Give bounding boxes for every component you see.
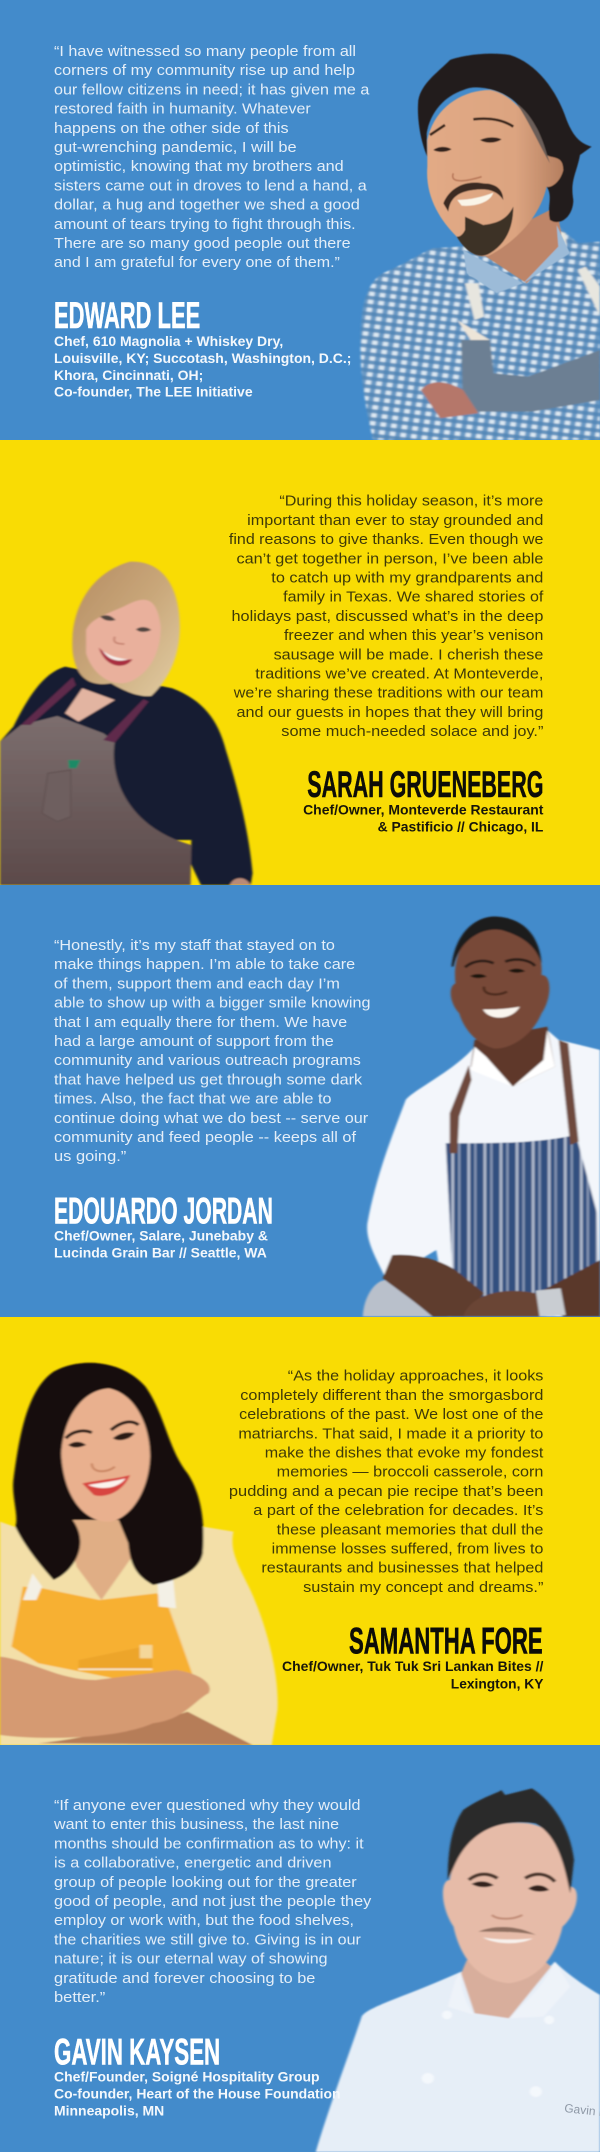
quote: Gavin Kaysen: months should be confirmation as to why: it <box>54 1835 364 1852</box>
quote: Gavin Kaysen: employ or work with, but the food shelves, <box>54 1912 354 1929</box>
quote: Gavin Kaysen: “If anyone ever questioned why they would <box>54 1797 360 1814</box>
quote: Samantha Fore: pudding and a pecan pie recipe that’s been <box>229 1483 543 1500</box>
quote: Gavin Kaysen: is a collaborative, energetic and driven <box>54 1855 332 1872</box>
quote: Gavin Kaysen: the charities we still give to. Giving is in our <box>54 1931 361 1948</box>
quote: Sarah Grueneberg: we’re sharing these traditions with our team <box>233 685 543 702</box>
quote: Edward Lee: corners of my community rise up and help <box>54 62 355 79</box>
role: Samantha Fore: Chef/Owner, Tuk Tuk Sri Lankan Bites // <box>282 1659 544 1674</box>
quote: Gavin Kaysen: good of people, and not just the people they <box>54 1893 372 1910</box>
panel: Edward Lee <box>54 45 600 440</box>
quote: Edouardo Jordan: community and various outreach programs <box>54 1052 361 1069</box>
quote: Gavin Kaysen: want to enter this business, the last nine <box>53 1816 339 1833</box>
role: Samantha Fore: Lexington, KY <box>451 1676 543 1691</box>
role: Edward Lee: Chef, 610 Magnolia + Whiskey Dry, <box>54 334 283 349</box>
role: Edouardo Jordan: Chef/Owner, Salare, Junebaby & <box>54 1229 268 1244</box>
quote: Edouardo Jordan: continue doing what we do best -- serve our <box>54 1110 368 1127</box>
quote: Edward Lee: amount of tears trying to fight through this. <box>54 216 356 233</box>
role: Edward Lee <box>54 334 351 399</box>
quote: Edouardo Jordan: that have helped us get through some dark <box>54 1071 363 1088</box>
quote: Edward Lee <box>54 43 370 271</box>
quote: Gavin Kaysen <box>53 1797 372 2006</box>
quote: Edouardo Jordan: that I am equally there for them. We have <box>54 1014 347 1031</box>
quote: Gavin Kaysen: nature; it is our eternal way of showing <box>54 1951 328 1968</box>
quote: Sarah Grueneberg: holidays past, discussed what’s in the deep <box>232 608 543 625</box>
quote: Edward Lee: dollar, a hug and together we shed a good <box>54 197 360 214</box>
quote: Samantha Fore: immense losses suffered, from lives to <box>272 1540 543 1558</box>
quote: Sarah Grueneberg: family in Texas. We shared stories of <box>283 589 544 606</box>
quote: Edward Lee: and I am grateful for every one of them.” <box>54 254 340 271</box>
quote: Sarah Grueneberg: some much-needed solace and joy.” <box>281 723 543 740</box>
quote: Edward Lee: restored faith in humanity. Whatever <box>54 101 311 118</box>
role: Gavin Kaysen: Minneapolis, MN <box>54 2103 164 2118</box>
photo: Edouardo Jordan <box>363 917 600 1317</box>
photo: Edward Lee <box>360 54 600 440</box>
quote: Samantha Fore: “As the holiday approaches, it looks <box>288 1368 543 1385</box>
photo: Gavin Kaysen <box>316 1788 600 2152</box>
name: Edward Lee: EDWARD LEE <box>54 295 200 336</box>
quote: Sarah Grueneberg: freezer and when this year’s venison <box>284 627 543 644</box>
quote: Edward Lee: optimistic, knowing that my brothers and <box>54 158 344 175</box>
quote: Sarah Grueneberg: to catch up with my grandparents and <box>271 570 543 586</box>
quote: Sarah Grueneberg: find reasons to give thanks. Even though we <box>229 531 543 548</box>
quote: Gavin Kaysen: group of people looking out for the greater <box>54 1874 357 1891</box>
role: Gavin Kaysen <box>54 2070 341 2118</box>
role: Gavin Kaysen: Co-founder, Heart of the House Foundation <box>54 2086 341 2101</box>
quote: Sarah Grueneberg: can’t get together in person, I’ve been able <box>236 550 543 567</box>
quote: Samantha Fore: these pleasant memories that dull the <box>277 1521 543 1538</box>
quote: Samantha Fore: make the dishes that evoke my fondest <box>265 1444 544 1462</box>
quote: Edouardo Jordan: able to show up with a bigger smile knowing <box>54 995 370 1012</box>
quote: Samantha Fore: sustain my concept and dreams.” <box>303 1579 543 1596</box>
photo: Samantha Fore <box>0 1363 278 1745</box>
role: Edward Lee: Co-founder, The LEE Initiative <box>54 384 253 399</box>
quote: Gavin Kaysen: better.” <box>54 1989 105 2006</box>
quote: Edward Lee: our fellow citizens in need; it has given me a <box>54 81 370 98</box>
quote: Samantha Fore: celebrations of the past. We lost one of the <box>239 1406 543 1423</box>
quote: Edouardo Jordan: us going.” <box>54 1148 126 1165</box>
role: Edouardo Jordan <box>54 1229 268 1261</box>
quote: Samantha Fore: matriarchs. That said, I made it a priority to <box>238 1425 543 1442</box>
quote: Gavin Kaysen: gratitude and forever choosing to be <box>54 1970 315 1987</box>
panel: Sarah Grueneberg <box>0 440 600 885</box>
role: Edward Lee: Louisville, KY; Succotash, Washington, D.C.; <box>54 351 351 366</box>
quote: Sarah Grueneberg: “During this holiday season, it’s more <box>279 493 543 510</box>
quote: Sarah Grueneberg: important than ever to stay grounded and <box>247 512 543 529</box>
quote: Sarah Grueneberg <box>229 493 544 740</box>
quote: Edouardo Jordan: had a large amount of support from the <box>54 1033 334 1050</box>
quote: Sarah Grueneberg: traditions we’ve created. At Monteverde, <box>255 666 543 682</box>
quote: Edouardo Jordan <box>54 937 370 1165</box>
quote: Edward Lee: sisters came out in droves to lend a hand, a <box>54 177 367 194</box>
photo: Sarah Grueneberg <box>0 562 253 885</box>
quote: Edouardo Jordan: “Honestly, it’s my staff that stayed on to <box>54 937 335 954</box>
role: Samantha Fore <box>282 1659 544 1691</box>
panel: Gavin Kaysen <box>54 1788 600 2152</box>
panel: Edouardo Jordan <box>54 916 600 1317</box>
role: Edouardo Jordan: Lucinda Grain Bar // Seattle, WA <box>54 1246 267 1261</box>
quote: Edward Lee: happens on the other side of this <box>54 120 289 137</box>
role: Sarah Grueneberg <box>303 803 544 835</box>
quote: Samantha Fore: a part of the celebration for decades. It’s <box>253 1502 543 1519</box>
quote: Edward Lee: “I have witnessed so many people from all <box>54 43 356 60</box>
quote: Samantha Fore: restaurants and businesses that helped <box>261 1560 543 1577</box>
quote: Samantha Fore <box>229 1368 544 1596</box>
role: Edward Lee: Khora, Cincinnati, OH; <box>54 368 203 383</box>
quote: Edouardo Jordan: community and feed people -- keeps all of <box>54 1129 357 1146</box>
panel: Samantha Fore <box>0 1317 600 1745</box>
quote: Edward Lee: There are so many good people out there <box>54 235 351 252</box>
quote: Edouardo Jordan: make things happen. I’m able to take care <box>54 956 355 973</box>
name: Edouardo Jordan: EDOUARDO JORDAN <box>54 1190 273 1231</box>
quote: Sarah Grueneberg: sausage will be made. I cherish these <box>274 646 543 663</box>
quote: Samantha Fore: completely different than the smorgasbord <box>240 1387 543 1404</box>
role: Sarah Grueneberg: & Pastificio // Chicago, IL <box>378 820 543 835</box>
quote: Edouardo Jordan: of them, support them and each day I’m <box>54 975 340 992</box>
quote: Edward Lee: gut-wrenching pandemic, I will be <box>54 139 297 156</box>
quote: Edouardo Jordan: times. Also, the fact that we are able to <box>54 1091 332 1108</box>
quote: Samantha Fore: memories — broccoli casserole, corn <box>277 1464 543 1481</box>
name: Gavin Kaysen: GAVIN KAYSEN <box>54 2031 220 2072</box>
role: Sarah Grueneberg: Chef/Owner, Monteverde Restaurant <box>303 803 544 818</box>
role: Gavin Kaysen: Chef/Founder, Soigné Hospitality Group <box>54 2070 320 2085</box>
quote: Sarah Grueneberg: and our guests in hopes that they will bring <box>236 704 543 721</box>
